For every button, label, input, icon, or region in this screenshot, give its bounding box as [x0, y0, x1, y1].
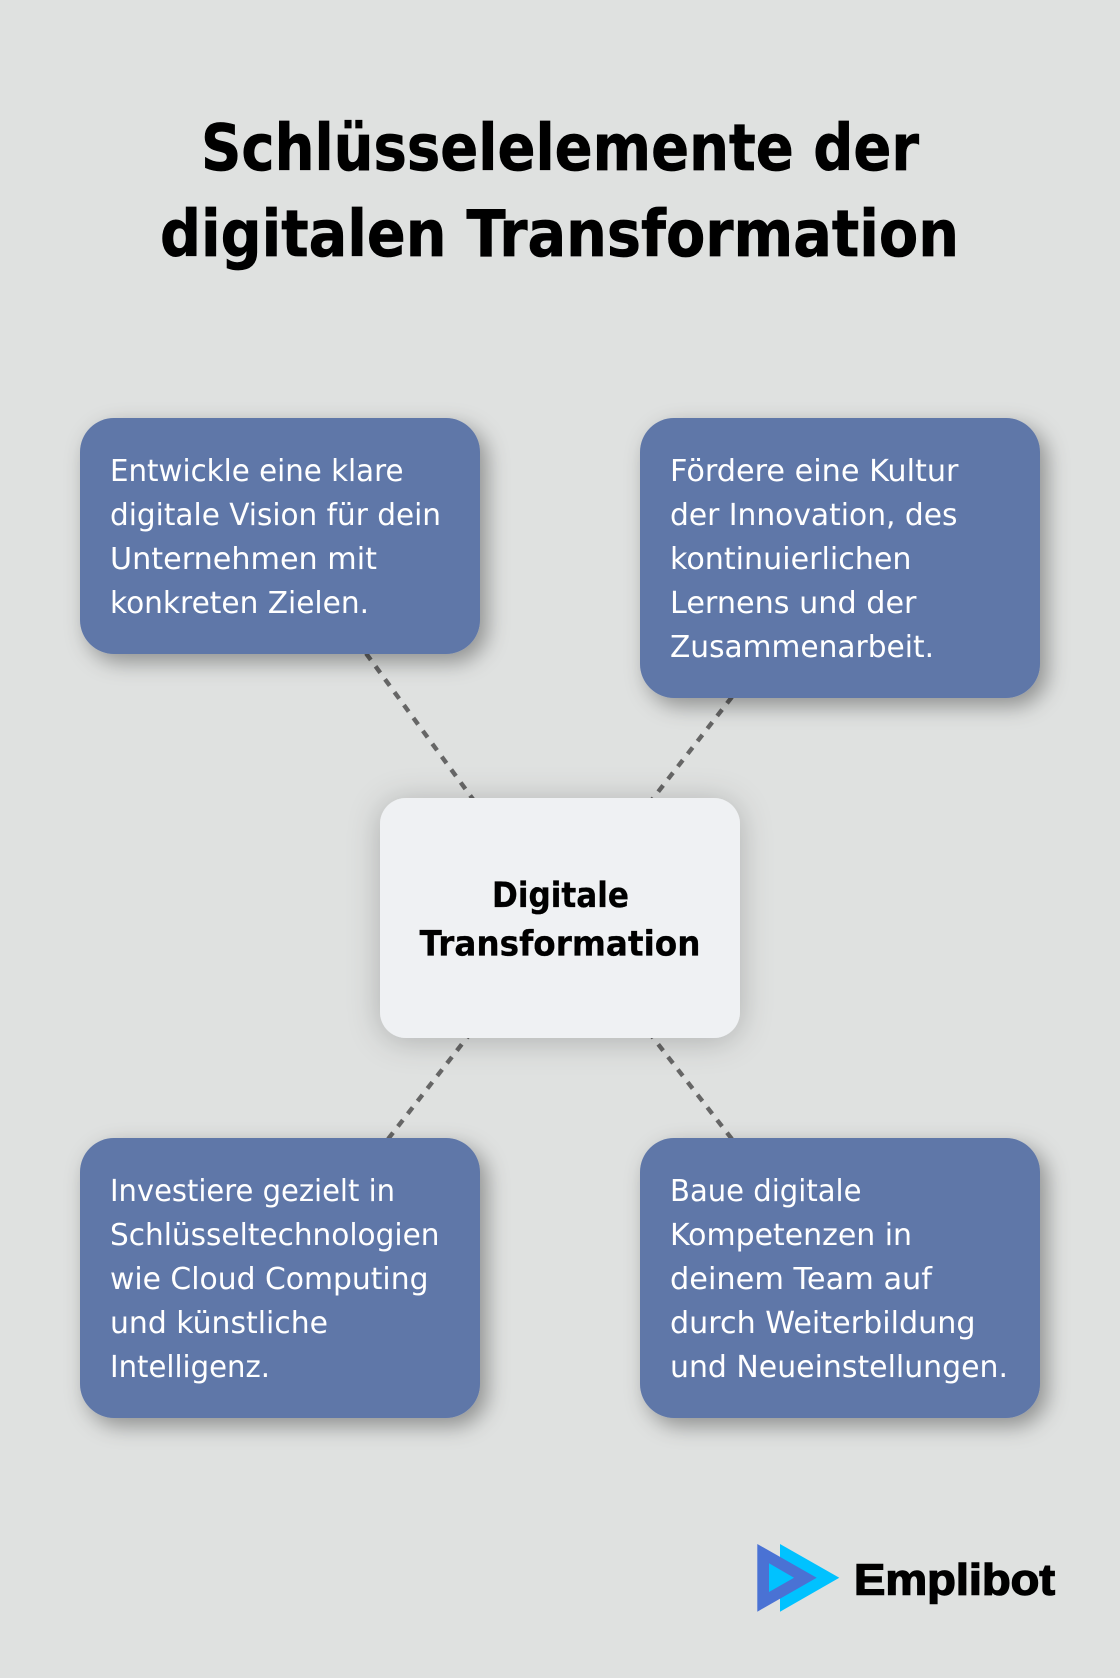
panel: digitale Kompetenzen: deinem Team auf	[670, 1262, 933, 1297]
panel: Schlüsseltechnologien: und künstliche	[110, 1306, 328, 1341]
connector: bottom right to center	[560, 918, 840, 1278]
panel: Schlüsseltechnologien	[80, 1138, 480, 1418]
panel: Schlüsseltechnologien: Schlüsseltechnologien	[110, 1218, 440, 1253]
title: Schlüsselelemente der	[201, 112, 919, 186]
title	[160, 112, 959, 272]
logo: Emplibot	[757, 1544, 1055, 1612]
panel: center node	[380, 798, 740, 1038]
panel: Kultur der Innovation: Fördere eine Kultur	[670, 454, 959, 489]
panel: digitale Kompetenzen: Kompetenzen in	[670, 1218, 912, 1253]
panel: digitale Vision: Entwickle eine klare	[110, 454, 404, 489]
panel: Schlüsseltechnologien: Investiere gezielt in	[110, 1174, 395, 1209]
panel: digitale Vision: digitale Vision für dein	[110, 498, 441, 533]
panel: Schlüsseltechnologien: Intelligenz.	[110, 1350, 270, 1385]
panel: Kultur der Innovation: Lernens und der	[670, 586, 917, 621]
logo: Emplibot: Emplibot	[854, 1556, 1055, 1604]
panel: digitale Vision: Unternehmen mit	[110, 542, 377, 577]
panel: Kultur der Innovation: der Innovation, des	[670, 498, 958, 533]
panel: digitale Vision	[80, 418, 480, 654]
title: digitalen Transformation	[160, 198, 959, 272]
panel: digitale Kompetenzen	[640, 1138, 1040, 1418]
panel: digitale Kompetenzen: durch Weiterbildung	[670, 1306, 976, 1341]
connector: bottom left to center	[280, 918, 560, 1278]
connector: top left to center	[280, 536, 560, 918]
panel: Kultur der Innovation: kontinuierlichen	[670, 542, 912, 577]
panel: Kultur der Innovation: Zusammenarbeit.	[670, 630, 934, 665]
panel: Schlüsseltechnologien: wie Cloud Computing	[110, 1262, 428, 1297]
panel: center node: Digitale	[492, 876, 629, 916]
panel: digitale Kompetenzen: Baue digitale	[670, 1174, 862, 1209]
panel: center node: Transformation	[420, 924, 700, 964]
connector: top right to center	[560, 558, 840, 918]
panel: digitale Kompetenzen: und Neueinstellungen.	[670, 1350, 1008, 1385]
panel: digitale Vision: konkreten Zielen.	[110, 586, 369, 621]
panel: Kultur der Innovation	[640, 418, 1040, 698]
